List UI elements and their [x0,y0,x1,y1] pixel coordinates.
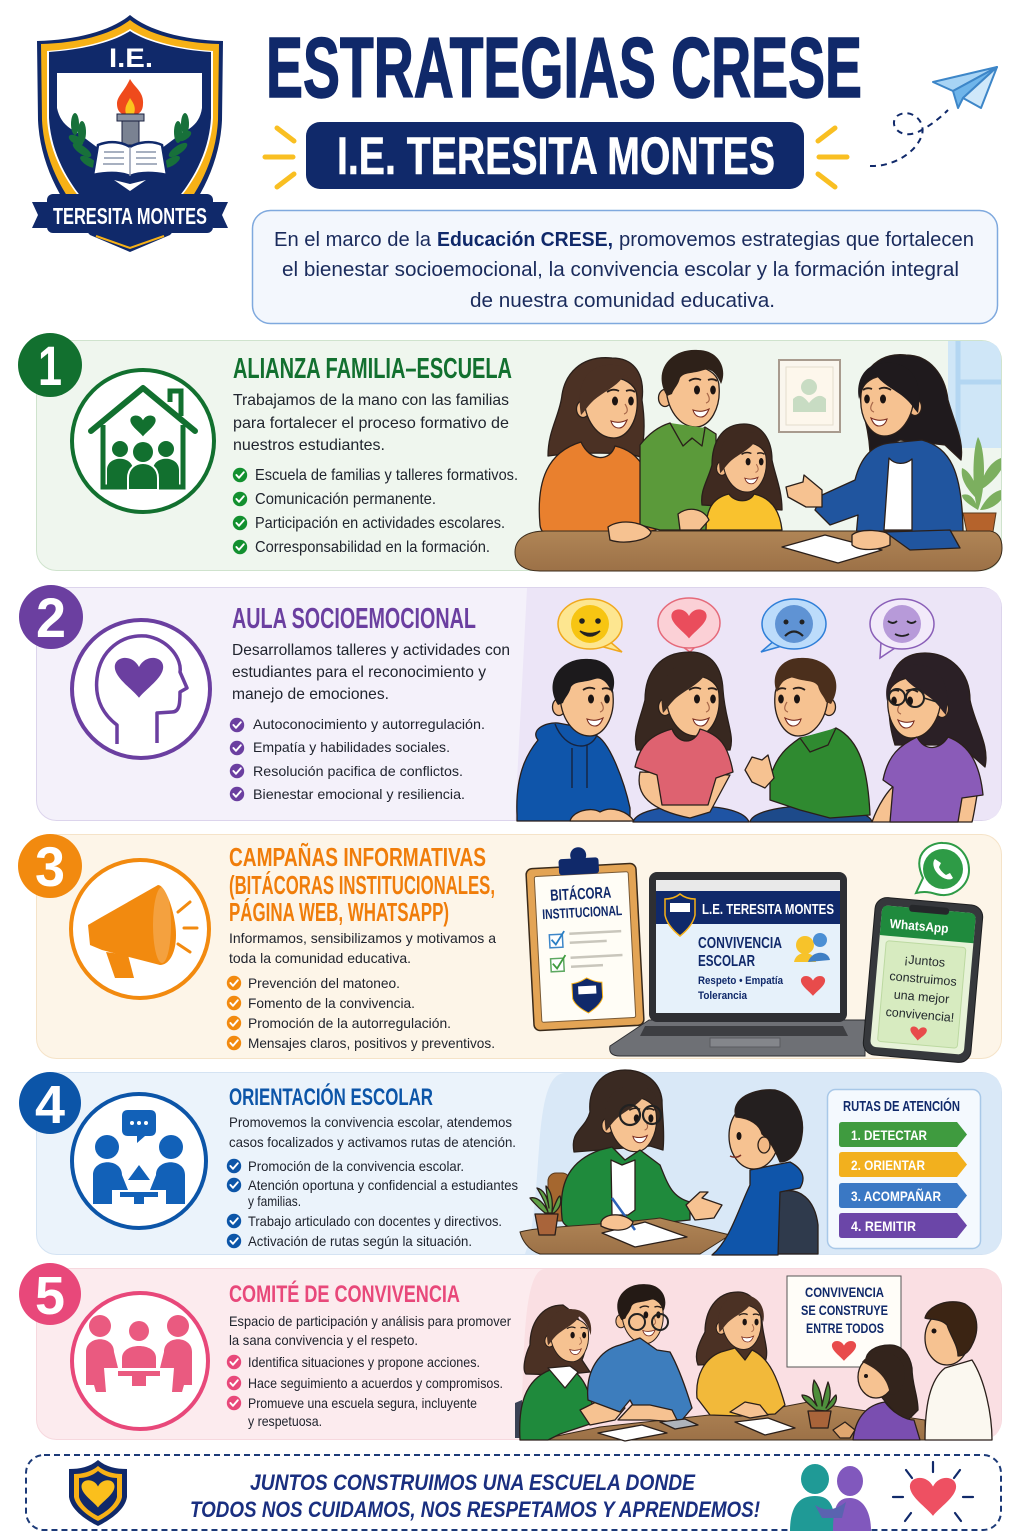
closing message: JUNTOS CONSTRUIMOS UNA ESCUELA DONDE [250,1470,696,1495]
heading: COMITÉ DE CONVIVENCIA [229,1280,460,1308]
laptop: Respeto • Empatía [698,975,784,987]
notebook [602,1222,687,1247]
badge 1 [18,333,82,397]
happy bubble [558,599,622,652]
poster: SE CONSTRUYE [801,1302,888,1318]
table [515,531,1002,571]
heart bubble [658,598,720,652]
intro box: En el marco de la [274,229,432,251]
school crest [32,15,228,252]
hand with pen [601,1198,635,1230]
man in white [925,1302,992,1440]
checklist: Trabajo articulado con docentes y directivos. [248,1213,502,1229]
panel 5: comité de convivencia [19,1263,1002,1441]
checklist: Hace seguimiento a acuerdos y compromisos. [248,1375,503,1391]
description: nuestros estudiantes. [233,437,385,454]
checklist: Activación de rutas según la situación. [248,1233,472,1249]
heading: PÁGINA WEB, WHATSAPP) [229,897,449,927]
description: toda la comunidad educativa. [229,950,411,966]
checklist: Participación en actividades escolares. [255,515,505,532]
emotion bubbles [558,598,934,658]
description [229,930,496,966]
woman in purple with glasses [872,653,986,822]
students group [517,652,986,822]
illustration: counselor and student [520,1070,818,1255]
badge 2 [19,585,83,649]
phone: convivencia! [885,1005,955,1025]
chair [515,1400,522,1438]
heading: AULA SOCIOEMOCIONAL [232,603,476,635]
plant [530,1186,561,1235]
poster: ENTRE TODOS [806,1320,884,1336]
checklist [233,467,518,556]
teacher in blue blazer [786,355,964,550]
subtitle banner [306,122,804,189]
panel 2: aula socioemocional [19,585,1002,822]
icon: radiant heart [893,1462,973,1521]
crest initials: I.E. [109,43,153,73]
description [232,642,510,703]
poster [787,1276,901,1367]
plant [802,1380,836,1428]
intro box: de nuestra comunidad educativa. [470,290,775,312]
panel 1: alianza familia-escuela [18,333,1002,571]
icon: megaphone [71,860,209,998]
calm bubble [870,599,934,658]
sparkles left [265,128,294,187]
checklist: y respetuosa. [248,1413,322,1429]
step 3: 3. ACOMPAÑAR [851,1187,941,1204]
checklist: Bienestar emocional y resiliencia. [253,786,465,802]
student with backpack [712,1090,818,1255]
illustration: family meeting with teacher [515,341,1002,571]
laptop [610,872,865,1056]
clipboard: INSTITUCIONAL [542,902,623,922]
phone [862,897,984,1063]
boy in blue hoodie [517,659,634,821]
man in blue with glasses [588,1284,692,1422]
badge 3 [18,834,82,898]
icon: two people embracing [790,1464,871,1531]
card title: RUTAS DE ATENCIÓN [843,1097,960,1115]
description: la sana convivencia y el respeto. [229,1332,418,1348]
description [229,1114,516,1150]
papers on table [598,1418,795,1441]
checklist: Resolución pacifica de conflictos. [253,763,463,779]
rutas de atención card [828,1090,980,1248]
boy in green [745,658,872,822]
step 3 [839,1183,967,1208]
poster: CONVIVENCIA [805,1284,884,1300]
badge 3: 3 [35,835,65,898]
icon: family house [72,370,214,512]
checklist: Promoción de la convivencia escolar. [248,1158,464,1174]
heading: ALIANZA FAMILIA–ESCUELA [233,353,512,385]
badge 4 [19,1072,81,1135]
checklist: Identifica situaciones y propone acciones. [248,1354,480,1370]
heading: (BITÁCORAS INSTITUCIONALES, [229,870,495,900]
badge 1: 1 [38,334,62,397]
icon: head with heart [72,620,210,758]
checklist: Empatía y habilidades sociales. [253,739,450,755]
woman in yellow [696,1292,785,1418]
checklist: Promueve una escuela segura, incluyente [248,1395,477,1411]
clipboard: BITÁCORA [550,883,612,905]
girl in purple [833,1345,920,1440]
checklist [227,1354,503,1429]
panel 4: orientación escolar [19,1070,1002,1255]
checklist: Comunicación permanente. [255,491,436,508]
phone: WhatsApp [889,916,949,936]
phone: construimos [889,969,957,989]
description: Promovemos la convivencia escolar, atendemos [229,1114,512,1130]
step 1: 1. DETECTAR [851,1127,927,1143]
checklist: Promoción de la autorregulación. [248,1015,451,1031]
daughter in yellow [702,424,782,530]
laptop: ESCOLAR [698,953,755,970]
intro box: Educación CRESE, [437,229,613,251]
step 1 [839,1122,967,1147]
icon: shield heart [69,1460,127,1526]
ribbon [32,194,228,233]
description: casos focalizados y activamos rutas de atención. [229,1134,516,1150]
laptop: CONVIVENCIA [698,935,782,952]
table [538,1402,925,1440]
closing message: TODOS NOS CUIDAMOS, NOS RESPETAMOS Y APRENDEMOS! [190,1497,760,1522]
counselor [548,1070,722,1230]
panel 3: campañas informativas [18,834,1002,1063]
laptop: L.E. TERESITA MONTES [702,901,834,918]
laptop: Tolerancia [698,990,748,1002]
checklist [227,975,495,1051]
clipboard [525,844,644,1031]
table [520,1218,730,1254]
badge 5: 5 [35,1266,65,1326]
teacher's hand [786,475,822,507]
description: estudiantes para el reconocimiento y [232,664,486,681]
step 2: 2. ORIENTAR [851,1157,925,1173]
whatsapp icon [916,843,969,895]
step 4 [839,1213,967,1238]
description: para fortalecer el proceso formativo de [233,415,509,432]
open hand [686,1192,722,1220]
description [229,1313,511,1348]
subtitle banner: I.E. TERESITA MONTES [337,127,775,186]
paper plane [870,67,997,166]
clasped hands [833,1422,855,1438]
description [233,392,509,454]
checklist: Mensajes claros, positivos y preventivos. [248,1035,495,1051]
badge 2: 2 [36,586,66,649]
description: Desarrollamos talleres y actividades con [232,642,510,659]
woman in green [520,1305,625,1440]
girl in pink [633,652,749,822]
illustration: committee meeting [515,1276,992,1441]
open book [93,142,167,176]
hands on table [608,522,960,550]
step 4: 4. REMITIR [851,1218,916,1234]
notebook [782,535,882,563]
checklist: Prevención del matoneo. [248,975,400,991]
description: manejo de emociones. [232,686,389,703]
checklist [227,1158,518,1249]
wall frame [779,360,840,432]
checklist: Escuela de familias y talleres formativos. [255,467,518,484]
closing banner [26,1455,1001,1531]
intro box: el bienestar socioemocional, la convivencia escolar y la formación integral [282,259,959,281]
phone: una mejor [893,988,950,1006]
window [948,341,1001,448]
mother in orange [539,358,658,543]
checklist [230,716,485,802]
heading [229,842,495,927]
checklist: Corresponsabilidad en la formación. [255,539,490,556]
torch [117,79,144,145]
laurels [67,113,193,170]
checklist: Atención oportuna y confidencial a estudiantes [248,1177,518,1193]
badge 5 [19,1263,81,1326]
intro box: promovemos estrategias que fortalecen [619,229,974,251]
icon: counseling [72,1094,206,1228]
step 2 [839,1152,967,1177]
speaking hand [745,755,774,788]
father in green [640,350,723,530]
sad bubble [761,599,826,652]
heading: ORIENTACIÓN ESCOLAR [229,1083,433,1111]
icon: committee [72,1293,208,1429]
closing message [190,1470,760,1522]
description: Trabajamos de la mano con las familias [233,392,509,409]
father's hand [678,509,709,530]
checklist: y familias. [248,1193,301,1209]
plant [962,437,1001,538]
description: Espacio de participación y análisis para promover [229,1313,511,1329]
heading: CAMPAÑAS INFORMATIVAS [229,842,486,872]
badge 4: 4 [35,1075,65,1135]
intro box [252,210,998,324]
checklist: Autoconocimiento y autorregulación. [253,716,485,732]
sparkles right [818,128,847,187]
phone: ¡Juntos [904,952,946,970]
checklist: Fomento de la convivencia. [248,995,415,1011]
description: Informamos, sensibilizamos y motivamos a [229,930,496,946]
ribbon: TERESITA MONTES [53,203,207,229]
